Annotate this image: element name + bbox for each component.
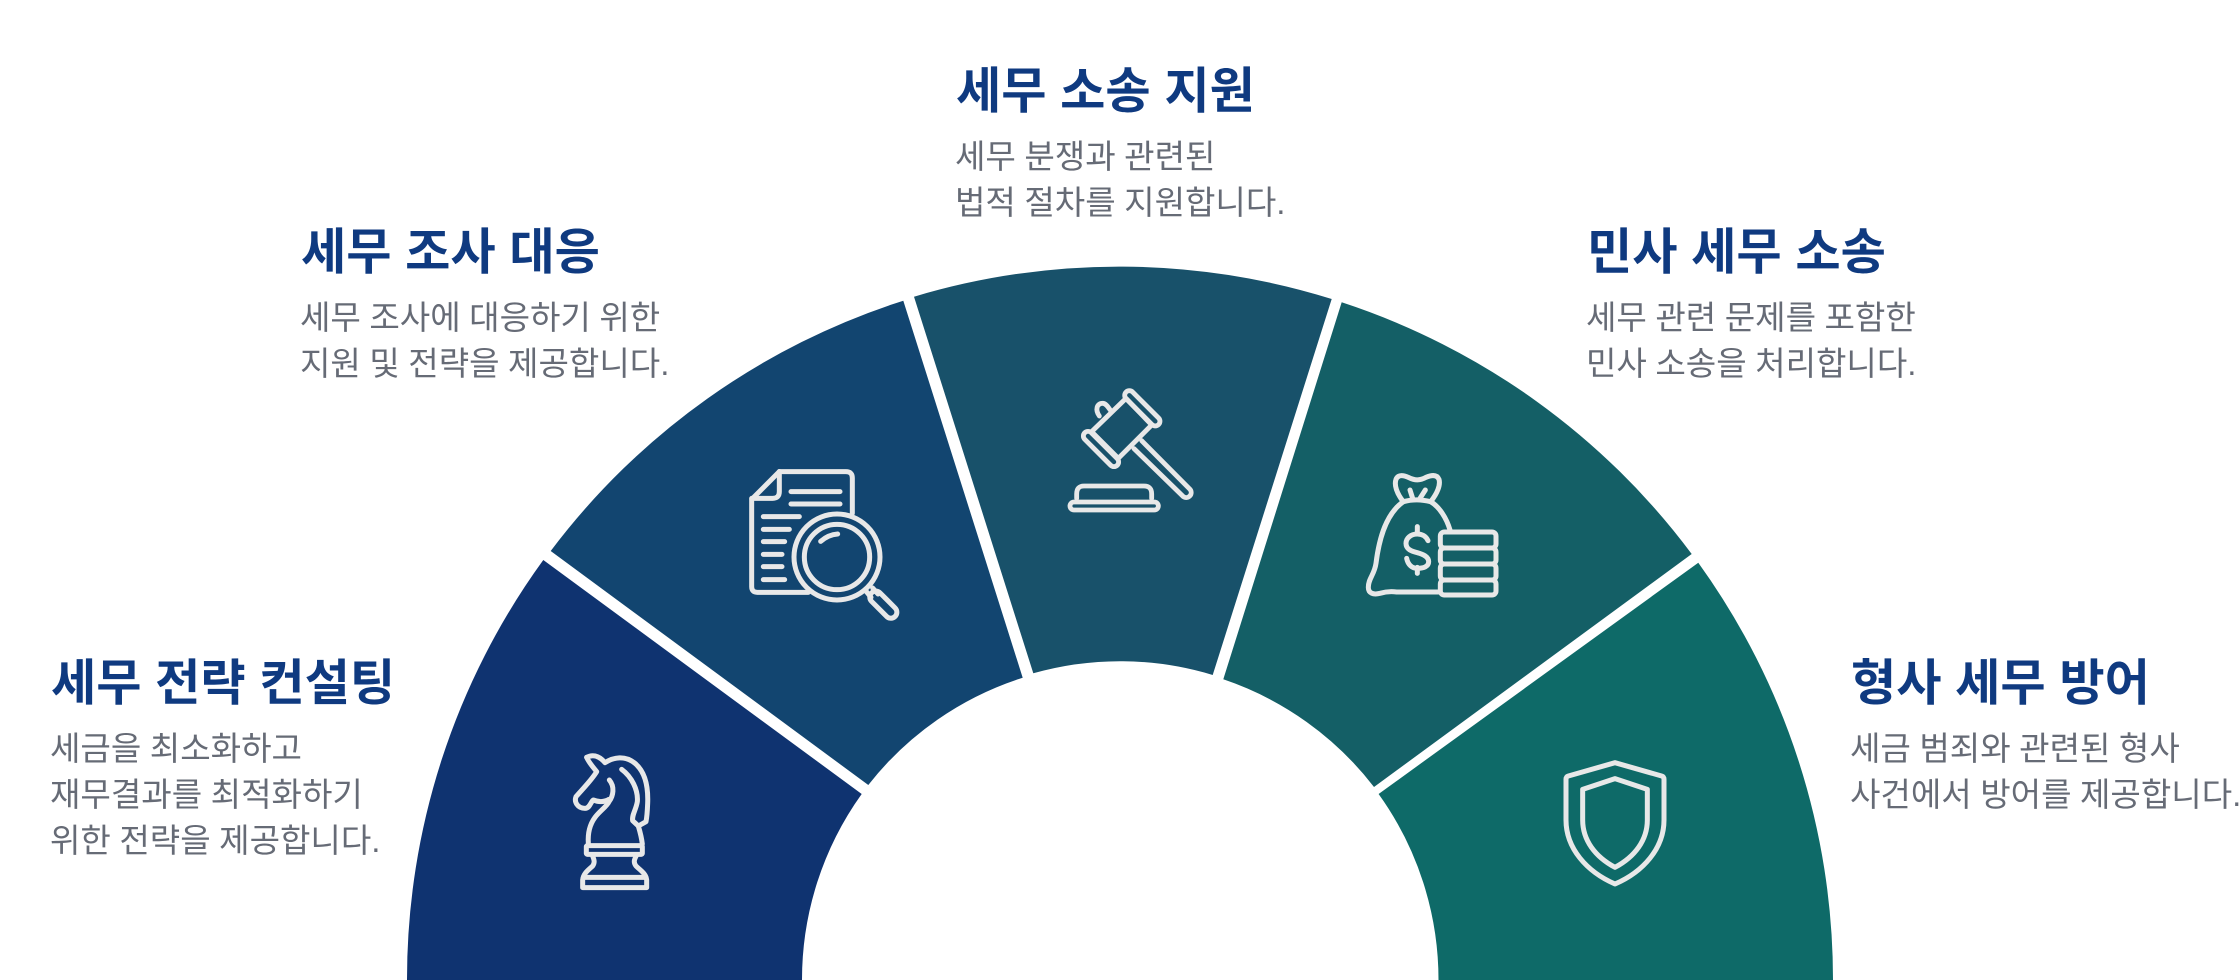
- segment 5: criminal tax defense: [1379, 563, 1833, 980]
- heading: 민사 세무 소송: [1587, 224, 1886, 280]
- label: tax strategy consulting: [50, 656, 395, 860]
- icon: gavel: [1070, 389, 1191, 510]
- description: [300, 300, 669, 383]
- icon: document with magnifier: [752, 472, 899, 621]
- label: civil tax litigation: [1586, 224, 1916, 383]
- icon: money bag with coins: [1368, 476, 1496, 595]
- label: criminal tax defense: [1850, 656, 2240, 814]
- label: tax investigation response: [300, 224, 669, 383]
- description: 민사 소송을 처리합니다.: [1586, 346, 1916, 383]
- description: 세금을 최소화하고: [50, 731, 302, 768]
- icon: chess knight: [575, 756, 648, 888]
- heading: 세무 조사 대응: [301, 224, 600, 280]
- description: [955, 139, 1286, 222]
- description: [50, 731, 380, 860]
- icon: shield: [1566, 763, 1664, 884]
- description: 세무 관련 문제를 포함한: [1586, 300, 1916, 337]
- heading: 세무 전략 컨설팅: [51, 656, 395, 711]
- segment 4: civil tax litigation: [1223, 302, 1692, 787]
- description: [1586, 300, 1916, 383]
- description: 지원 및 전략을 제공합니다.: [300, 346, 669, 383]
- description: 세무 분쟁과 관련된: [955, 139, 1215, 176]
- heading: 세무 소송 지원: [956, 64, 1255, 118]
- label: tax litigation support: [955, 64, 1286, 222]
- description: 위한 전략을 제공합니다.: [50, 823, 380, 860]
- description: 재무결과를 최적화하기: [50, 777, 363, 814]
- heading: 형사 세무 방어: [1851, 656, 2150, 711]
- description: 법적 절차를 지원합니다.: [955, 185, 1286, 222]
- description: 세무 조사에 대응하기 위한: [300, 300, 660, 337]
- description: 세금 범죄와 관련된 형사: [1850, 731, 2180, 768]
- segment 2: tax investigation: [551, 301, 1023, 785]
- segment 3: tax litigation support: [914, 267, 1332, 675]
- description: [1850, 731, 2240, 814]
- segment 1: tax strategy consulting: [407, 560, 862, 980]
- description: 사건에서 방어를 제공합니다.: [1850, 777, 2240, 814]
